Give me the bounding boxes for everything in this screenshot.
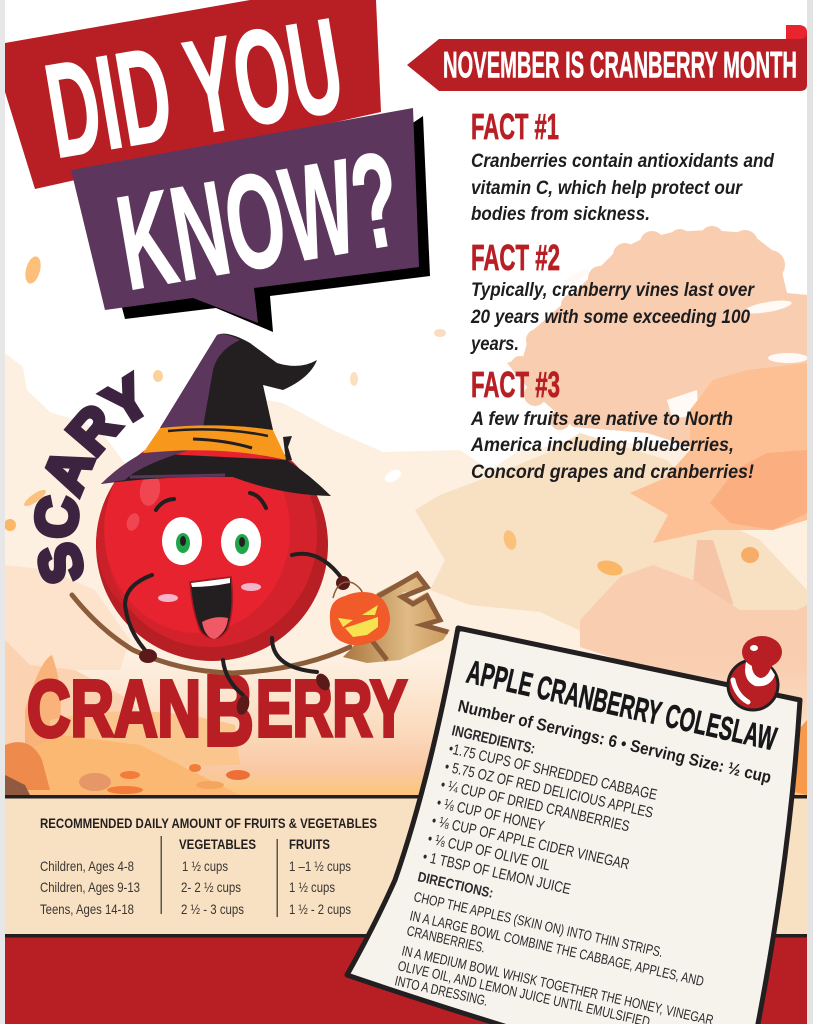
fact 3 text: Concord grapes and cranberries! <box>471 462 754 483</box>
cheeks <box>158 583 261 602</box>
autumn landscape background <box>4 226 808 800</box>
heading: cranberry: ERRY <box>256 664 407 753</box>
mouth <box>190 577 232 639</box>
ingredients: • ⅛ CUP OF OLIVE OIL <box>426 830 552 874</box>
fact 2 <box>470 237 755 355</box>
directions: CRANBERRIES. <box>405 922 487 956</box>
fact 3 text: America including blueberries, <box>470 435 734 456</box>
vegetable amounts: 2- 2 ½ cups <box>181 879 241 895</box>
column heading: vegetables: VEGETABLES <box>179 836 256 852</box>
eyes <box>162 517 261 566</box>
ingredients: • 1 TBSP OF LEMON JUICE <box>421 848 572 898</box>
heading: cranberry: CRAN <box>27 664 201 753</box>
servings: Number of Servings: 6 • Serving Size: ½ cup <box>456 696 773 787</box>
ingredients: • ¼ CUP OF DRIED CRANBERRIES <box>439 776 631 835</box>
fact 2 text: 20 years with some exceeding 100 <box>470 307 750 328</box>
pumpkin bucket <box>330 582 390 645</box>
ingredients: • ⅛ CUP OF HONEY <box>435 794 546 835</box>
fact 1 text <box>471 151 774 225</box>
ingredients: • 5.75 OZ OF RED DELICIOUS APPLES <box>443 758 655 822</box>
ingredients <box>421 722 659 898</box>
fact 1 heading: FACT #1 <box>471 106 559 147</box>
fruit amounts: 1 ½ cups <box>289 879 335 895</box>
fact 3 text <box>470 409 754 483</box>
fact 3 heading: FACT #3 <box>471 364 560 405</box>
ingredients: •1.75 CUPS OF SHREDDED CABBAGE <box>447 740 659 804</box>
row labels: Children, Ages 9-13 <box>40 879 140 895</box>
berry body <box>96 450 328 661</box>
directions: INTO A DRESSING. <box>393 972 490 1009</box>
purple speech bubble: know? <box>71 108 430 332</box>
fact 3 text: A few fruits are native to North <box>470 409 733 430</box>
fact 3 <box>470 364 754 483</box>
fact 2 text: Typically, cranberry vines last over <box>471 280 755 301</box>
broomstick <box>72 595 350 673</box>
arms and legs <box>125 554 343 695</box>
vegetable amounts <box>181 858 244 917</box>
vegetable amounts: 2 ½ - 3 cups <box>181 901 244 917</box>
broom head <box>343 572 450 663</box>
heading: know?: KNOW? <box>108 124 411 319</box>
push pin <box>728 636 782 710</box>
cranberry witch character <box>72 334 450 716</box>
ingredients: • ⅛ CUP OF APPLE CIDER VINEGAR <box>430 812 631 873</box>
witch hat <box>101 334 331 496</box>
table panel: recommended daily amount <box>5 795 807 938</box>
fact 1 text: vitamin C, which help protect our <box>471 178 743 199</box>
fact 1 <box>471 106 774 225</box>
banner: november is cranberry month <box>407 25 807 91</box>
fruit amounts: 1 –1 ½ cups <box>289 858 351 874</box>
directions: IN A LARGE BOWL COMBINE THE CABBAGE, APPLES, AND <box>408 907 705 989</box>
heading: scary: SCARY <box>34 370 144 584</box>
directions: DIRECTIONS: <box>416 868 495 901</box>
hands and feet <box>139 576 350 716</box>
fruit amounts <box>289 858 351 917</box>
row labels: Children, Ages 4-8 <box>40 858 134 874</box>
row labels <box>40 858 140 917</box>
fact 2 text <box>470 280 755 355</box>
fruit amounts: 1 ½ - 2 cups <box>289 901 351 917</box>
fact 2 text: years. <box>470 334 519 355</box>
table title: RECOMMENDED DAILY AMOUNT OF FRUITS & VEGETABLES <box>40 815 377 831</box>
red banner: did you <box>5 0 381 189</box>
fact 1 text: Cranberries contain antioxidants and <box>471 151 774 172</box>
row labels: Teens, Ages 14-18 <box>40 901 134 917</box>
vegetable amounts: 1 ½ cups <box>182 858 228 874</box>
heading: cranberry: B <box>204 655 254 767</box>
recipe card <box>347 628 800 1024</box>
fact 1 text: bodies from sickness. <box>471 204 650 225</box>
column heading: fruits: FRUITS <box>289 836 330 852</box>
fact 2 heading: FACT #2 <box>471 237 560 278</box>
directions: CHOP THE APPLES (SKIN ON) INTO THIN STRIPS. <box>412 888 665 960</box>
directions <box>393 868 718 1024</box>
red footer band <box>5 938 807 1024</box>
eyebrows <box>156 493 266 510</box>
ingredients: INGREDIENTS: <box>450 722 537 758</box>
